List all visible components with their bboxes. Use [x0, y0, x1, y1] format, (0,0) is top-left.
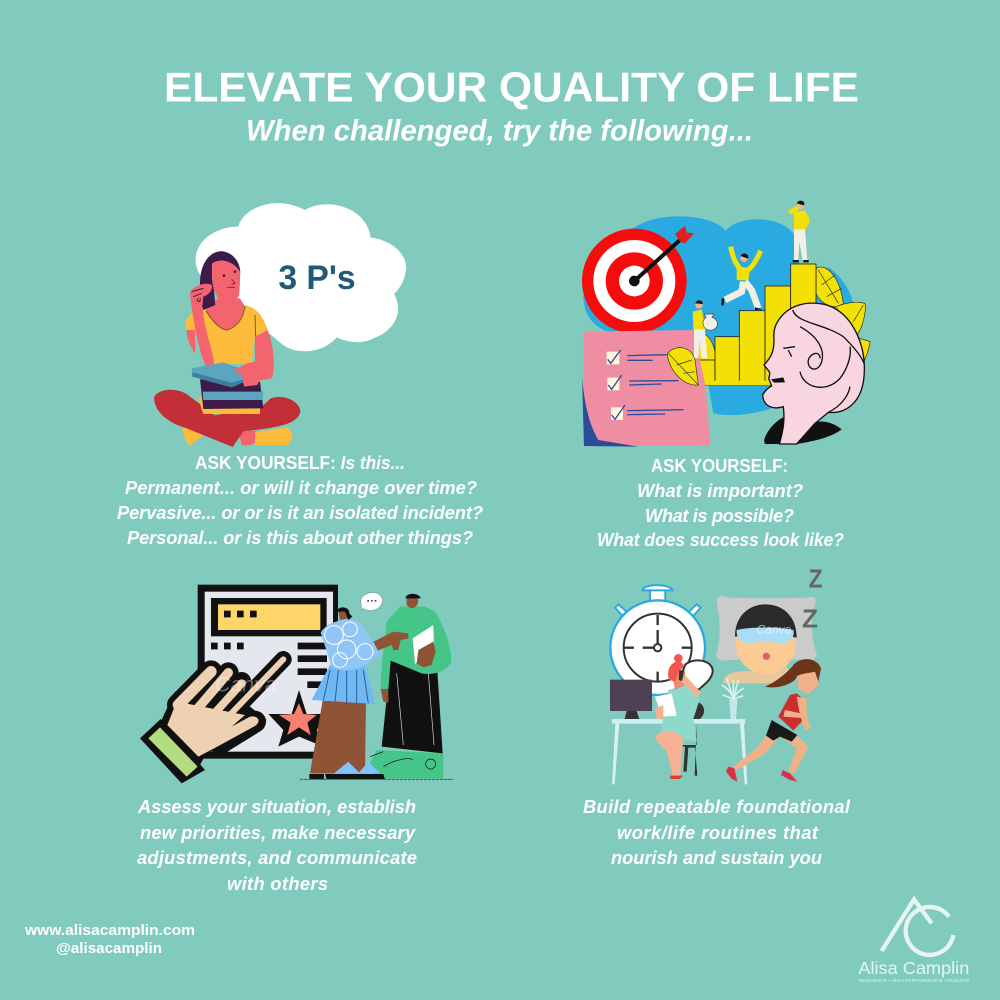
pointing hand [140, 659, 283, 783]
woman [154, 251, 300, 447]
cloud label: 3 P's [278, 259, 356, 297]
text block: what is important [597, 455, 844, 550]
stopwatch [610, 585, 705, 695]
illustration: goals, target and stairs [582, 201, 870, 447]
logo: Alisa Camplin [858, 899, 969, 983]
person on top [789, 201, 809, 262]
illustration: clock, sleep, desk work and runner [610, 564, 823, 784]
vase plant [722, 678, 744, 719]
website and handle: www.alisacamplin.com [24, 922, 195, 939]
text block: 3 P's questions: Pervasive... or or is it an isolated incident? [117, 502, 483, 523]
text block: build routines: nourish and sustain you [611, 847, 822, 868]
target with arrow [582, 226, 694, 333]
website and handle [24, 922, 195, 957]
desk [612, 719, 747, 784]
sleep letters: Z [809, 564, 823, 594]
logo: Alisa Camplin: Alisa Camplin [858, 958, 969, 978]
text block: build routines: work/life routines that [617, 822, 819, 843]
text block: 3 P's questions: Permanent... or will it change over time? [125, 477, 477, 498]
runner [726, 659, 821, 782]
text block: 3 P's questions: ASK YOURSELF: Is this... [195, 452, 405, 473]
person jumping [721, 247, 763, 310]
logo: Alisa Camplin: RESILIENCE • HIGH PERFORMANCE • RESULTS [858, 978, 969, 983]
text block: 3 P's questions [117, 452, 483, 548]
subtitle: When challenged, try the following... [246, 114, 753, 148]
text block: assess your situation [137, 796, 417, 894]
blue blob [583, 216, 854, 415]
pillow with sleeping face [716, 596, 817, 683]
checklist note [582, 330, 711, 447]
person with vase [693, 300, 718, 358]
document [198, 585, 338, 759]
text block: what is important: What does success look like? [597, 529, 844, 550]
sleep letters: Z [802, 604, 818, 634]
text block: build routines: Build repeatable foundational [583, 796, 851, 817]
website and handle: @alisacamplin [56, 940, 162, 957]
text block: assess your situation: new priorities, make necessary [140, 822, 416, 843]
text block: assess your situation: Assess your situation, establish [137, 796, 416, 817]
monitor [610, 680, 652, 719]
leaves behind stairs [690, 267, 870, 365]
text block: build routines [583, 796, 851, 868]
text block: what is important: ASK YOURSELF: [651, 455, 788, 476]
text block: what is important: What is important? [637, 480, 803, 501]
illustration: woman thinking with cloud [154, 203, 406, 447]
thought cloud [196, 203, 406, 351]
woman head [763, 303, 864, 444]
watermark: Canva [215, 673, 277, 697]
heart [680, 660, 713, 690]
title: ELEVATE YOUR QUALITY OF LIFE [164, 64, 859, 110]
man in green [367, 594, 451, 778]
watermark: Canva [757, 622, 792, 636]
text block: what is important: What is possible? [645, 505, 794, 526]
text block: assess your situation: with others [227, 873, 328, 894]
stairs [690, 264, 816, 385]
illustration: hand, document and two people [140, 585, 453, 783]
text block: 3 P's questions: Personal... or is this about other things? [127, 527, 473, 548]
woman at desk [655, 654, 704, 779]
sleep letters [802, 564, 823, 634]
text block: assess your situation: adjustments, and communicate [137, 847, 417, 868]
woman in blue [309, 592, 408, 779]
